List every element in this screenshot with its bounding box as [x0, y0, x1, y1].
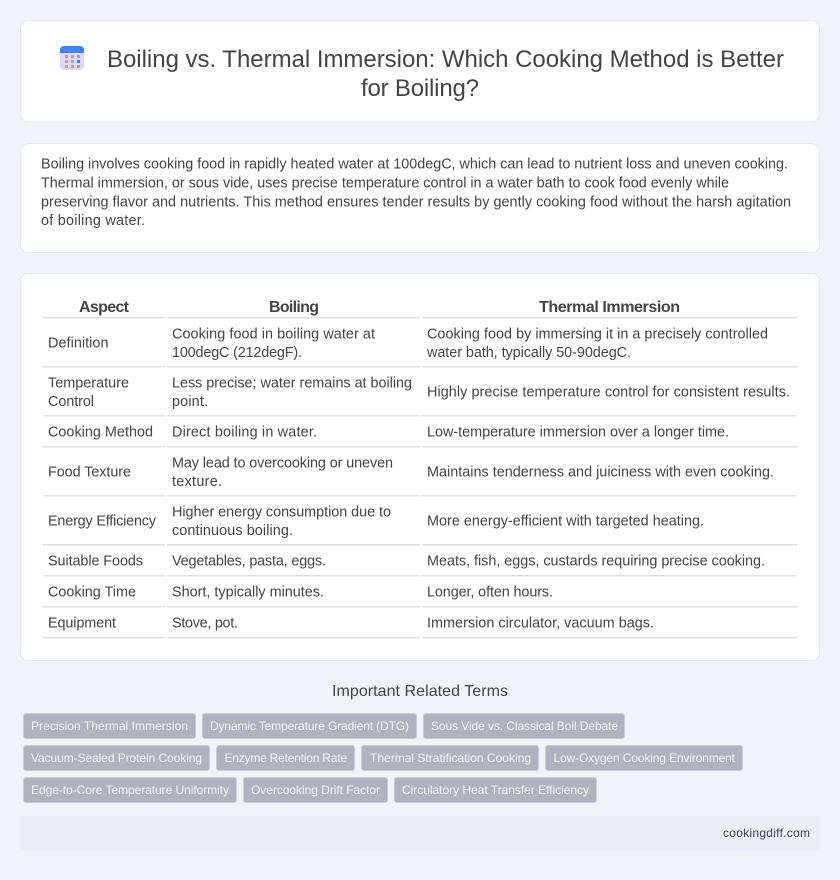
table row: energy efficiency: Energy Efficiency — [48, 514, 157, 530]
text block: introduction paragraph: preserving flavor and nutrients. This method ensures tender results by gently cooking food without the harsh agitation — [41, 194, 791, 210]
table row: cooking time — [48, 584, 553, 600]
table row: definition: water bath, typically 50-90degC. — [426, 345, 631, 361]
text block: introduction paragraph: Thermal immersion, or sous vide, uses precise temperature control in a water bath to cook food evenly while — [41, 176, 729, 192]
panel: related term tags — [24, 714, 742, 802]
table row: temperature control: point. — [172, 394, 208, 410]
tag: overcooking drift factor — [244, 778, 388, 802]
table row: definition — [48, 326, 768, 361]
text block: introduction paragraph: of boiling water. — [41, 213, 145, 229]
heading: important related terms: Important Related Terms — [332, 683, 508, 700]
tag: enzyme retention rate — [216, 746, 354, 770]
panel: introduction — [20, 144, 820, 252]
icon: calendar — [60, 46, 84, 70]
table row: temperature control: Control — [48, 394, 94, 410]
tag: dynamic temperature gradient: Dynamic Temperature Gradient (DTG) — [210, 719, 409, 733]
tag: low-oxygen cooking environment: Low-Oxygen Cooking Environment — [554, 751, 736, 765]
tag: circulatory heat transfer efficiency — [394, 778, 596, 802]
tag: sous vide debate: Sous Vide vs. Classical Boil Debate — [431, 719, 618, 733]
table row: energy efficiency: Higher energy consumption due to — [172, 504, 391, 520]
table row: cooking time: Longer, often hours. — [427, 584, 553, 600]
tag: sous vide debate — [424, 714, 624, 738]
footer: cookingdiff.com — [723, 826, 810, 840]
table row: food texture: May lead to overcooking or uneven — [172, 456, 393, 472]
title: for Boiling? — [361, 75, 479, 102]
panel: header — [20, 20, 820, 122]
table row: temperature control — [48, 376, 790, 410]
tag: low-oxygen cooking environment — [546, 746, 742, 770]
table header row: Boiling — [269, 299, 319, 316]
table row: energy efficiency — [48, 504, 704, 539]
title: Boiling vs. Thermal Immersion: Which Cooking Method is Better — [107, 46, 784, 73]
table row: food texture: Maintains tenderness and juiciness with even cooking. — [427, 464, 774, 480]
table row: suitable foods: Suitable Foods — [48, 554, 143, 570]
tag: thermal stratification cooking: Thermal Stratification Cooking — [370, 751, 531, 765]
table row: temperature control: Temperature — [48, 376, 129, 392]
tag: thermal stratification cooking — [362, 746, 538, 770]
text block: introduction paragraph: Boiling involves cooking food in rapidly heated water at 100degC, which can lead to nutrient loss and uneven cooking. — [41, 156, 788, 172]
table row: cooking method — [48, 424, 729, 440]
tag: edge-to-core temperature uniformity: Edge-to-Core Temperature Uniformity — [31, 783, 229, 797]
table row: cooking time: Short, typically minutes. — [172, 584, 324, 600]
table row: temperature control: Less precise; water remains at boiling — [172, 376, 412, 392]
table row: suitable foods: Meats, fish, eggs, custards requiring precise cooking. — [427, 554, 765, 570]
table row: definition: Definition — [48, 336, 108, 352]
table header row — [79, 299, 680, 316]
table row: cooking time: Cooking Time — [48, 584, 136, 600]
tag: precision thermal immersion: Precision Thermal Immersion — [31, 719, 188, 733]
tag: enzyme retention rate: Enzyme Retention Rate — [224, 751, 347, 765]
tag: circulatory heat transfer efficiency: Circulatory Heat Transfer Efficiency — [402, 783, 589, 797]
tag: overcooking drift factor: Overcooking Drift Factor — [251, 783, 380, 797]
table row: equipment: Immersion circulator, vacuum bags. — [427, 616, 654, 632]
table row: suitable foods: Vegetables, pasta, eggs. — [172, 554, 326, 570]
table row: energy efficiency: More energy-efficient with targeted heating. — [427, 514, 704, 530]
tag: edge-to-core temperature uniformity — [24, 778, 236, 802]
footer — [20, 816, 820, 850]
table row: energy efficiency: continuous boiling. — [172, 523, 293, 539]
tag: vacuum-sealed protein cooking — [24, 746, 210, 770]
table row: suitable foods — [48, 554, 765, 570]
table row: equipment: Stove, pot. — [172, 616, 238, 632]
table header row: Aspect — [79, 299, 130, 316]
table row: equipment: Equipment — [48, 616, 116, 632]
table row: definition: Cooking food in boiling water at — [172, 326, 375, 342]
table row: temperature control: Highly precise temperature control for consistent results. — [427, 384, 790, 400]
table row: equipment — [48, 616, 654, 632]
table row: food texture — [48, 456, 774, 490]
table row: food texture: Food Texture — [48, 464, 131, 480]
tag: dynamic temperature gradient — [202, 714, 416, 738]
table row: definition: 100degC (212degF). — [172, 345, 302, 361]
tag: vacuum-sealed protein cooking: Vacuum-Sealed Protein Cooking — [31, 751, 202, 765]
table header row: Thermal Immersion — [539, 299, 680, 316]
panel: comparison table — [20, 274, 820, 660]
tag: precision thermal immersion — [24, 714, 196, 738]
table row: cooking method: Direct boiling in water. — [172, 424, 317, 440]
table row: cooking method: Cooking Method — [48, 424, 153, 440]
table row: definition: Cooking food by immersing it in a precisely controlled — [427, 326, 768, 342]
text block: introduction paragraph — [41, 156, 791, 229]
table row: cooking method: Low-temperature immersion over a longer time. — [427, 424, 729, 440]
title — [107, 46, 784, 102]
table row: food texture: texture. — [172, 474, 222, 490]
